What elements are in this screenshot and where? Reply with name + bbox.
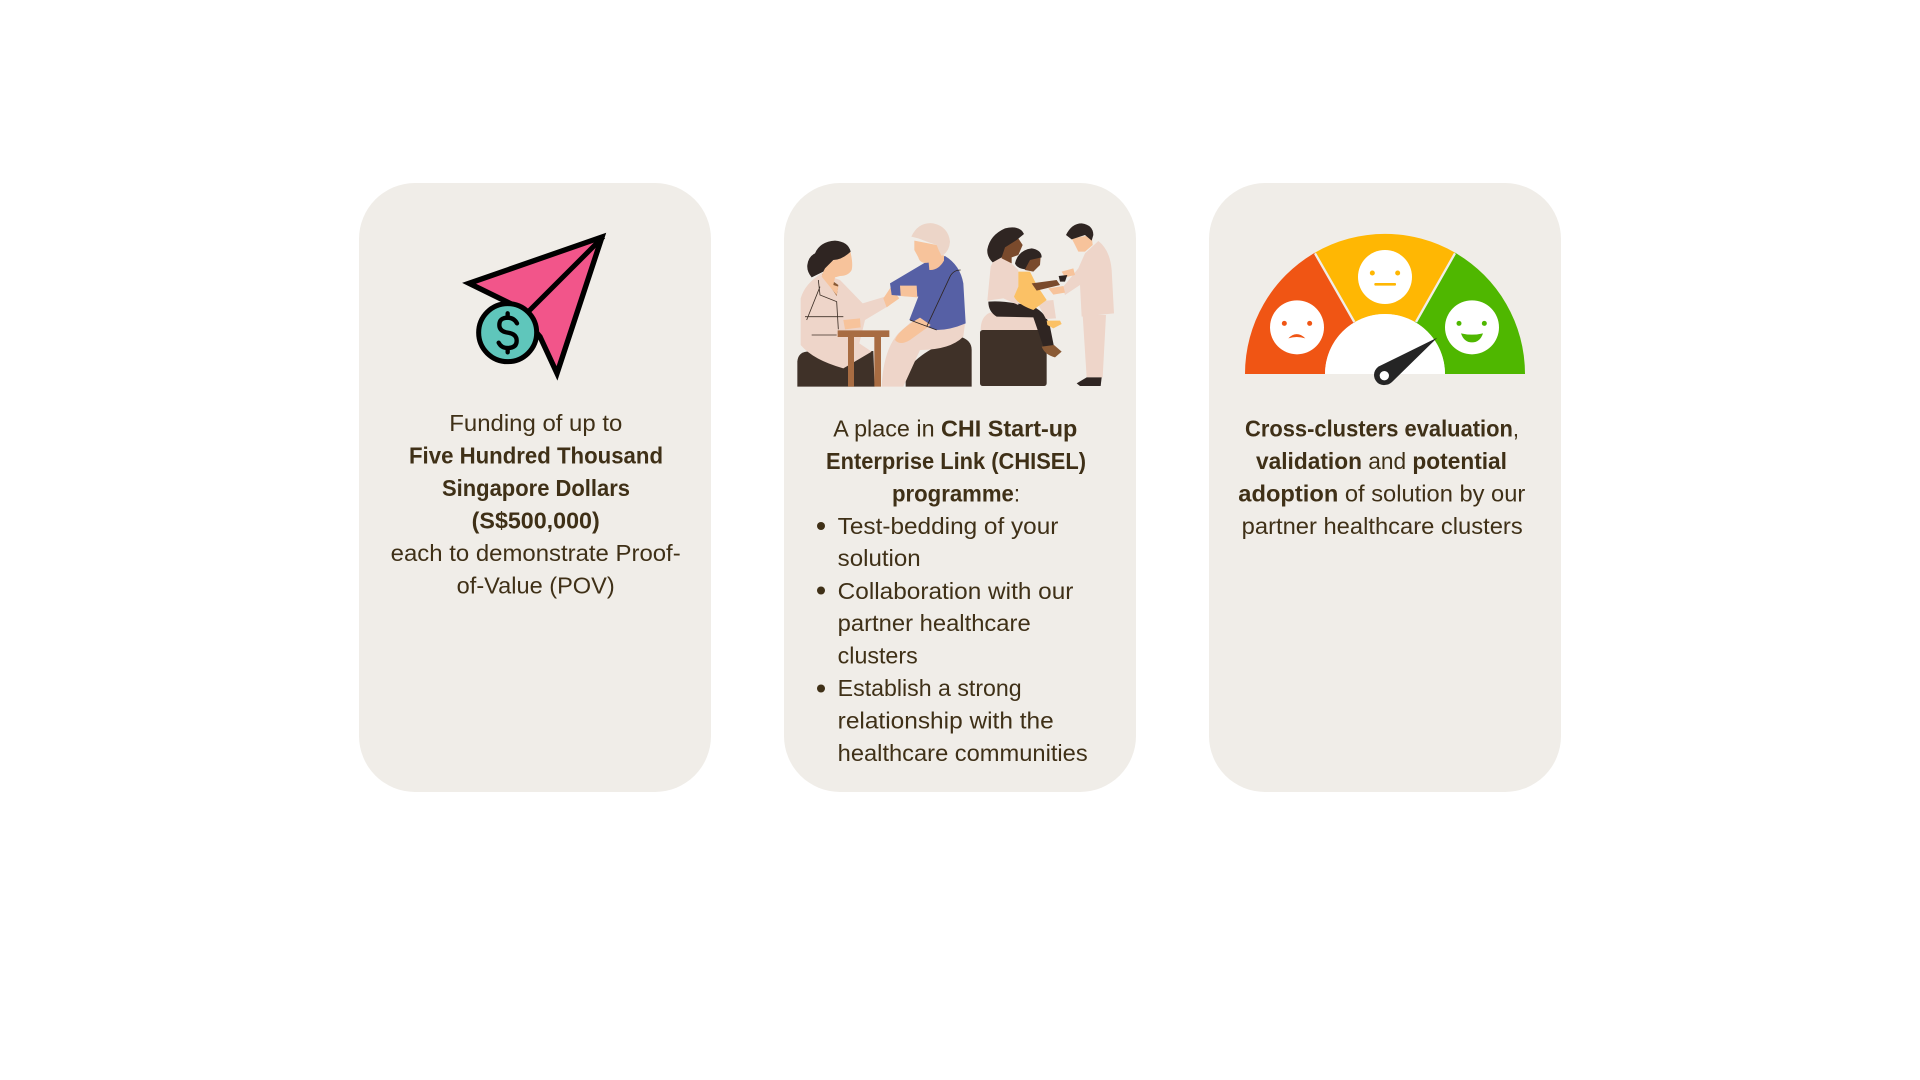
card background: evaluation — [1209, 183, 1561, 792]
text: evaluation description: partner healthcare clusters — [1242, 513, 1523, 539]
panel: evaluation — [1209, 183, 1561, 792]
bullet list: programme benefits: solution — [838, 545, 921, 571]
left doctor hair — [807, 241, 851, 277]
child face — [1025, 257, 1041, 272]
patient sweater lines — [910, 270, 961, 330]
bullet list: programme benefits: Collaboration with our — [838, 578, 1074, 604]
right cushion — [981, 313, 1038, 330]
mother shoe — [1042, 345, 1062, 357]
panel: funding — [359, 183, 711, 792]
bullet list: programme benefits — [817, 513, 1088, 766]
mother face — [1002, 238, 1023, 263]
right stool — [906, 337, 972, 387]
right doctor hands — [1048, 268, 1075, 295]
illustration: healthcare workers with patients — [797, 223, 1114, 387]
panel: CHISEL programme — [784, 183, 1136, 792]
right doctor face — [1072, 235, 1093, 252]
child hair — [1015, 248, 1042, 269]
mother sweater — [987, 256, 1018, 305]
text: funding description: of-Value (POV) — [457, 572, 615, 598]
icon: paper plane with dollar coin — [469, 237, 603, 373]
text: programme intro: programme: — [892, 480, 1020, 506]
text: funding description: each to demonstrate Proof- — [391, 540, 681, 566]
bullet list: programme benefits: relationship with the — [838, 708, 1054, 734]
face: happy — [1445, 300, 1499, 354]
text: funding description: Five Hundred Thousand — [409, 442, 663, 468]
text: funding description: Funding of up to — [449, 410, 622, 436]
medicine — [1059, 275, 1067, 282]
card background: programme — [784, 183, 1136, 792]
left stool — [797, 351, 875, 387]
bullet list: programme benefits: Establish a strong — [838, 675, 1022, 701]
bullet list: programme benefits: clusters — [838, 642, 918, 668]
text: funding description: (S$500,000) — [472, 508, 600, 534]
right block seat — [980, 330, 1047, 386]
child arm — [1032, 280, 1060, 291]
card background: funding — [359, 183, 711, 792]
child legs and shoe — [1047, 321, 1062, 328]
text: programme intro — [826, 416, 1086, 506]
patient neck and face — [914, 241, 944, 270]
text: evaluation description — [1238, 416, 1526, 539]
text: evaluation description: adoption of solution by our — [1238, 480, 1526, 506]
right doctor shoes — [1077, 377, 1102, 386]
text: evaluation description: Cross-clusters evaluation, — [1245, 416, 1519, 442]
text: programme intro: A place in CHI Start-up — [833, 416, 1077, 442]
mother hair — [987, 227, 1024, 262]
left doctor coat — [801, 273, 887, 368]
left doctor face — [822, 250, 852, 295]
patient sweater — [890, 256, 966, 330]
gauge: satisfaction meter — [1245, 234, 1525, 385]
patient hands — [895, 286, 931, 343]
bullet list: programme benefits: healthcare communities — [838, 740, 1088, 766]
text: programme intro: Enterprise Link (CHISEL) — [826, 448, 1086, 474]
needle — [1374, 338, 1437, 385]
patient hair — [911, 223, 950, 256]
face: sad — [1270, 300, 1324, 354]
right doctor hair — [1066, 223, 1093, 241]
right doctor pants — [1083, 315, 1106, 377]
left doctor collar — [822, 273, 838, 296]
text: funding description: Singapore Dollars — [442, 475, 630, 501]
patient pants — [882, 320, 965, 387]
left doctor hands — [843, 287, 899, 329]
left doctor coat lines — [805, 280, 843, 335]
face: neutral — [1358, 250, 1412, 304]
bullet list: programme benefits: partner healthcare — [838, 610, 1031, 636]
text: funding description — [391, 410, 681, 598]
table — [838, 330, 889, 387]
right doctor coat — [1063, 241, 1114, 317]
text: evaluation description: validation and potential — [1256, 448, 1507, 474]
bullet list: programme benefits: Test-bedding of your — [838, 513, 1059, 539]
child overall — [1014, 272, 1047, 310]
mother pants — [988, 301, 1054, 347]
